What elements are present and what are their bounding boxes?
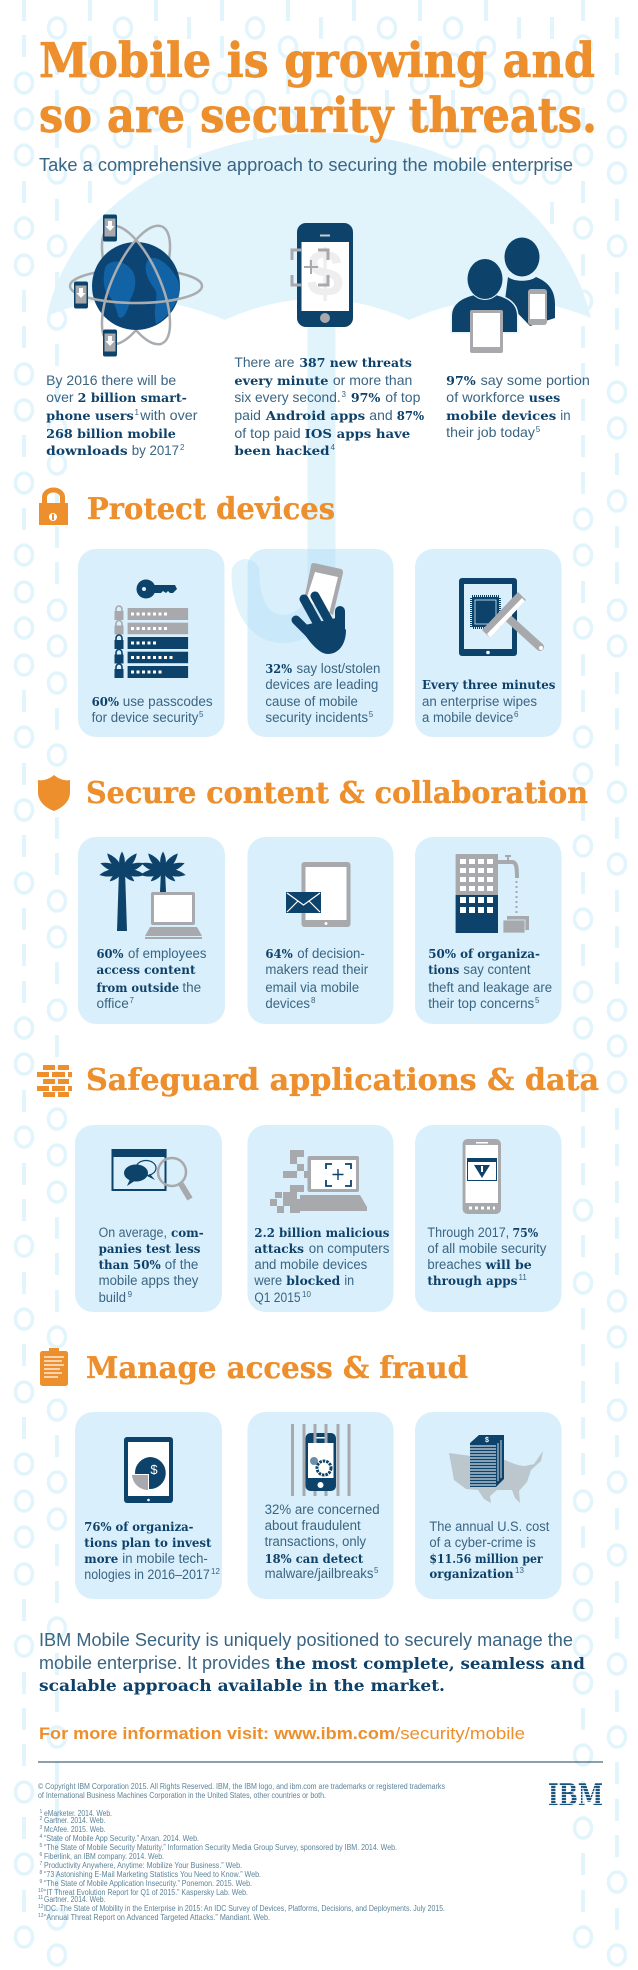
text: new threats stat: or more than [333, 372, 412, 388]
footnotes: 2 [40, 1816, 42, 1822]
text: email stat: email via mobile [265, 980, 359, 995]
text: new threats stat [234, 354, 424, 458]
text: smartphone users stat: 268 billion mobile [46, 426, 176, 441]
panel: app breaches [415, 1125, 562, 1312]
footnotes: Gartner. 2014. Web. [44, 1895, 106, 1904]
text: investment stat: in mobile tech- [122, 1551, 208, 1566]
icon: two people with devices [452, 238, 555, 353]
text: app breaches stat: 11 [518, 1273, 527, 1282]
icon: disintegrating laptop [270, 1150, 367, 1213]
heading: Safeguard applications & data: Safeguard applications & data [86, 1063, 599, 1098]
text: app testing stat: build [99, 1290, 126, 1305]
text: app testing stat: 9 [128, 1290, 133, 1299]
text: employees stat: 60% [96, 947, 124, 961]
heading: Manage access & fraud: Manage access & fraud [86, 1351, 468, 1386]
text: workforce stat: 97% [446, 373, 476, 388]
text: app breaches stat: breaches [427, 1257, 482, 1272]
icon: phone with scan target [292, 223, 353, 327]
title [39, 33, 597, 144]
text: passcodes stat: for device security [92, 710, 199, 725]
footnotes: 3 [40, 1825, 42, 1831]
text: email stat: devices [265, 996, 310, 1011]
text: smartphone users stat [46, 372, 198, 458]
copyright notice: of International Business Machines Corporation in the United States, other countries or both. [38, 1791, 326, 1800]
text: app testing stat: mobile apps they [99, 1273, 199, 1288]
text: smartphone users stat: phone users [46, 408, 134, 423]
umbrella canopy and shaft [47, 133, 591, 629]
text: malicious attacks stat: 10 [302, 1290, 311, 1299]
text: new threats stat: 97% [351, 390, 381, 405]
text: smartphone users stat: downloads [46, 443, 128, 458]
text: new threats stat: been hacked [234, 443, 330, 458]
icon: browser window with magnifier [112, 1149, 190, 1199]
call to action link: /security/mobile [395, 1724, 525, 1743]
closing statement: the most complete, seamless and [275, 1654, 585, 1673]
call to action link [39, 1724, 525, 1743]
text: smartphone users stat: 1 [134, 408, 140, 417]
text: new threats stat: There are [234, 354, 295, 370]
icon: phone with scan target: $ [307, 236, 343, 310]
footnotes: 13 [38, 1913, 44, 1919]
text: malicious attacks stat: on computers [309, 1241, 390, 1256]
text: workforce stat: mobile devices [446, 408, 556, 423]
text: new threats stat: and [369, 407, 393, 423]
text: employees stat: from outside [96, 981, 179, 995]
text: malicious attacks stat: 2.2 billion malicious [254, 1226, 390, 1240]
title: Mobile is growing and [39, 33, 595, 89]
text: jailbreak stat: 18% can detect [265, 1552, 364, 1566]
footnotes: “Annual Threat Report on Advanced Targeted Attacks.” Mandiant. Web. [44, 1913, 270, 1922]
text: jailbreak stat: about fraudulent [265, 1518, 361, 1533]
footnotes: 1 [40, 1809, 42, 1815]
text: investment stat [84, 1520, 220, 1582]
icon: shield [38, 775, 70, 811]
text: lost devices stat: devices are leading [265, 677, 378, 692]
text: email stat [265, 946, 369, 1011]
icon: tablet with chip and squeegee [459, 578, 543, 656]
icon: padlock [39, 490, 68, 525]
panel: employees outside office [78, 837, 225, 1024]
panel: email on mobile [248, 837, 394, 1024]
footnotes [38, 1809, 445, 1922]
icon: money stack over US map [449, 1435, 543, 1503]
footnotes: 6 [40, 1852, 42, 1858]
text: investment stat: tions plan to invest [84, 1536, 212, 1550]
text: data leakage stat: tions [428, 963, 460, 977]
footnotes: “IT Threat Evolution Report for Q1 of 2015.” Kaspersky Lab. Web. [44, 1888, 248, 1897]
icon: brick wall [37, 1065, 72, 1097]
panel: app testing [75, 1125, 222, 1312]
icon: tablet with envelope [286, 862, 350, 927]
text: jailbreak stat: 5 [374, 1566, 379, 1575]
text: data leakage stat: say content [463, 962, 531, 977]
text: malicious attacks stat: blocked [286, 1274, 341, 1288]
footnotes: 8 [40, 1870, 42, 1876]
text: malicious attacks stat: in [344, 1273, 354, 1288]
text: device wipes stat [422, 678, 556, 725]
text: new threats stat: paid [234, 407, 261, 423]
text: workforce stat [446, 372, 590, 440]
text: app breaches stat: will be [484, 1258, 532, 1272]
text: new threats stat: 3 [342, 390, 346, 399]
panel: data leakage [415, 837, 562, 1024]
icon: passcode rows [114, 606, 188, 678]
icon: money stack over US map: $ [485, 1437, 489, 1444]
text: device wipes stat: Every three minutes [422, 678, 556, 692]
text: cyber-crime stat: $11.56 million per [429, 1552, 543, 1566]
text: app testing stat: than 50% [99, 1258, 161, 1272]
text: employees stat: 7 [130, 996, 134, 1005]
closing statement: mobile enterprise. It provides [39, 1653, 270, 1673]
text: investment stat: nologies in 2016–2017 [84, 1567, 210, 1582]
icon: hand holding phone [296, 563, 346, 654]
panel: device wipes [415, 549, 562, 737]
icon: clipboard [40, 1348, 68, 1386]
footnotes: Gartner. 2014. Web. [44, 1816, 106, 1825]
text: new threats stat: of top paid [234, 425, 301, 441]
panel: malicious attacks [248, 1125, 394, 1312]
panel: lost devices [248, 549, 394, 737]
text: new threats stat: Android apps [265, 408, 365, 423]
text: new threats stat: 387 new threats [299, 355, 412, 370]
footnotes: “73 Astonishing E-Mail Marketing Statistics You Need to Know.” Web. [44, 1870, 261, 1879]
text: workforce stat: say some portion [481, 372, 590, 388]
text: malicious attacks stat: were [253, 1273, 282, 1288]
panel: jailbreak detection [248, 1412, 394, 1599]
text: employees stat [96, 946, 207, 1011]
text: malicious attacks stat: Q1 2015 [254, 1290, 301, 1305]
text: app breaches stat: Through 2017, [427, 1225, 509, 1240]
heading: Protect devices: Protect devices [87, 492, 335, 527]
closing statement [39, 1630, 585, 1695]
text: jailbreak stat: transactions, only [265, 1534, 366, 1549]
text: smartphone users stat: with over [139, 407, 198, 423]
text: data leakage stat: their top concerns [428, 996, 534, 1011]
text: email stat: 8 [311, 996, 316, 1005]
text: cyber-crime stat: of a cyber-crime is [429, 1535, 536, 1550]
text: smartphone users stat: By 2016 there will be [46, 372, 176, 388]
text: smartphone users stat: 2 [180, 443, 185, 452]
footnotes: McAfee. 2015. Web. [44, 1825, 106, 1834]
icon: phone behind bars [292, 1424, 349, 1496]
text: workforce stat: uses [529, 390, 560, 405]
IBM logo: IBM [548, 1778, 603, 1813]
icon: leaking building [456, 854, 529, 933]
text: email stat: 64% [265, 947, 293, 961]
text: device wipes stat: a mobile device [422, 710, 513, 725]
text: app testing stat: com- [171, 1226, 204, 1240]
text: new threats stat: every minute [234, 373, 328, 388]
icon: tablet with pie chart: $ [150, 1462, 158, 1477]
icon: palm trees and laptop [99, 851, 202, 939]
text: new threats stat: IOS apps have [305, 426, 410, 441]
text: app breaches stat: through apps [427, 1274, 518, 1288]
text: email stat: of decision- [297, 946, 365, 961]
text: app testing stat [99, 1225, 204, 1305]
text: investment stat: more [84, 1552, 119, 1566]
text: data leakage stat: 50% of organiza- [428, 947, 540, 961]
text: workforce stat: 5 [536, 425, 541, 434]
text: cyber-crime stat [429, 1519, 550, 1581]
text: device wipes stat: 6 [514, 710, 519, 719]
footnotes: “State of Mobile App Security.” Arxan. 2014. Web. [44, 1834, 199, 1843]
text: investment stat: 76% of organiza- [84, 1520, 194, 1534]
text: app breaches stat: 75% [512, 1226, 539, 1240]
icon: globe with orbiting phones [70, 214, 202, 356]
text: malicious attacks stat: and mobile devices [254, 1257, 368, 1272]
footnotes: 4 [40, 1834, 42, 1840]
text: cyber-crime stat: The annual U.S. cost [429, 1519, 550, 1534]
closing statement: IBM Mobile Security is uniquely positioned to securely manage the [39, 1630, 573, 1650]
text: employees stat: office [96, 996, 129, 1011]
text: jailbreak stat [265, 1502, 380, 1581]
text: app testing stat: panies test less [99, 1242, 201, 1256]
text: app testing stat: of the [165, 1257, 198, 1272]
text: passcodes stat: 60% [92, 695, 120, 709]
text: lost devices stat: say lost/stolen [296, 661, 380, 676]
text: employees stat: of employees [128, 946, 207, 961]
call to action link: For more information visit: www.ibm.com [39, 1724, 395, 1743]
text: jailbreak stat: malware/jailbreaks [265, 1566, 374, 1581]
text: lost devices stat [265, 661, 380, 725]
footnotes: Fiberlink, an IBM company. 2014. Web. [44, 1852, 164, 1861]
text: employees stat: access content [96, 963, 196, 977]
text: workforce stat: in [560, 407, 571, 423]
text: cyber-crime stat: organization [429, 1567, 514, 1581]
text: lost devices stat: 32% [265, 662, 293, 676]
text: employees stat: the [182, 980, 201, 995]
text: data leakage stat [428, 947, 552, 1011]
text: workforce stat: of workforce [446, 389, 525, 405]
text: device wipes stat: an enterprise wipes [422, 694, 537, 709]
text: lost devices stat: 5 [369, 710, 374, 719]
icon: tablet with pie chart [124, 1437, 173, 1503]
icon: key [136, 580, 177, 598]
panel: passcodes [78, 549, 224, 737]
text: email stat: makers read their [265, 962, 369, 977]
text: investment stat: 12 [211, 1567, 220, 1576]
footnotes: “The State of Mobile Application Insecurity.” Ponemon. 2015. Web. [44, 1879, 252, 1888]
panel: cyber-crime cost [415, 1412, 562, 1599]
text: app breaches stat: of all mobile security [427, 1241, 547, 1256]
panel: investment [75, 1412, 222, 1599]
text: new threats stat: six every second. [234, 389, 341, 405]
heading: Secure content & collaboration: Secure content & collaboration [86, 776, 588, 811]
subtitle: Take a comprehensive approach to securing the mobile enterprise [39, 155, 573, 175]
text: new threats stat: 87% [397, 408, 424, 423]
text: jailbreak stat: 32% are concerned [265, 1502, 380, 1517]
text: cyber-crime stat: 13 [515, 1566, 524, 1575]
footnotes: eMarketer. 2014. Web. [44, 1809, 112, 1818]
footnotes: 7 [40, 1861, 42, 1867]
text: data leakage stat: 5 [535, 996, 540, 1005]
footnotes: 11 [38, 1895, 43, 1901]
text: malicious attacks stat [253, 1226, 390, 1305]
text: smartphone users stat: 2 billion smart- [78, 390, 187, 405]
footnotes: Productivity Anywhere, Anytime: Mobilize Your Business.” Web. [44, 1861, 242, 1870]
text: app breaches stat [427, 1225, 547, 1288]
footnotes: 5 [40, 1843, 42, 1849]
text: data leakage stat: theft and leakage are [428, 980, 552, 995]
text: smartphone users stat: by 2017 [132, 442, 179, 458]
text: passcodes stat [92, 694, 213, 725]
footnotes: 9 [40, 1879, 42, 1885]
text: lost devices stat: cause of mobile [265, 694, 358, 709]
text: malicious attacks stat: attacks [254, 1242, 304, 1256]
footnotes: 10 [38, 1888, 44, 1894]
footnotes: “The State of Mobile Security Maturity.” Information Security Media Group Survey, sponsored by IBM. 2014. Web. [44, 1843, 397, 1852]
copyright notice: © Copyright IBM Corporation 2015. All Rights Reserved. IBM, the IBM logo, and ibm.com are trademarks or registered trademarks [38, 1782, 445, 1791]
text: passcodes stat: 5 [199, 710, 204, 719]
text: new threats stat: 4 [330, 443, 336, 452]
footnotes: 12 [38, 1904, 44, 1910]
icon: phone with warning [463, 1139, 501, 1214]
text: passcodes stat: use passcodes [123, 694, 213, 709]
footnotes: IDC. The State of Mobility in the Enterprise in 2015: An IDC Survey of Devices, Platforms, Decisions, and Deployments. July 2015. [44, 1904, 445, 1913]
text: app testing stat: On average, [99, 1225, 167, 1240]
text: new threats stat: of top [385, 389, 421, 405]
text: lost devices stat: security incidents [265, 710, 368, 725]
text: workforce stat: their job today [446, 424, 535, 440]
text: smartphone users stat: over [46, 389, 74, 405]
copyright notice [38, 1782, 445, 1800]
closing statement: scalable approach available in the market. [39, 1676, 445, 1695]
